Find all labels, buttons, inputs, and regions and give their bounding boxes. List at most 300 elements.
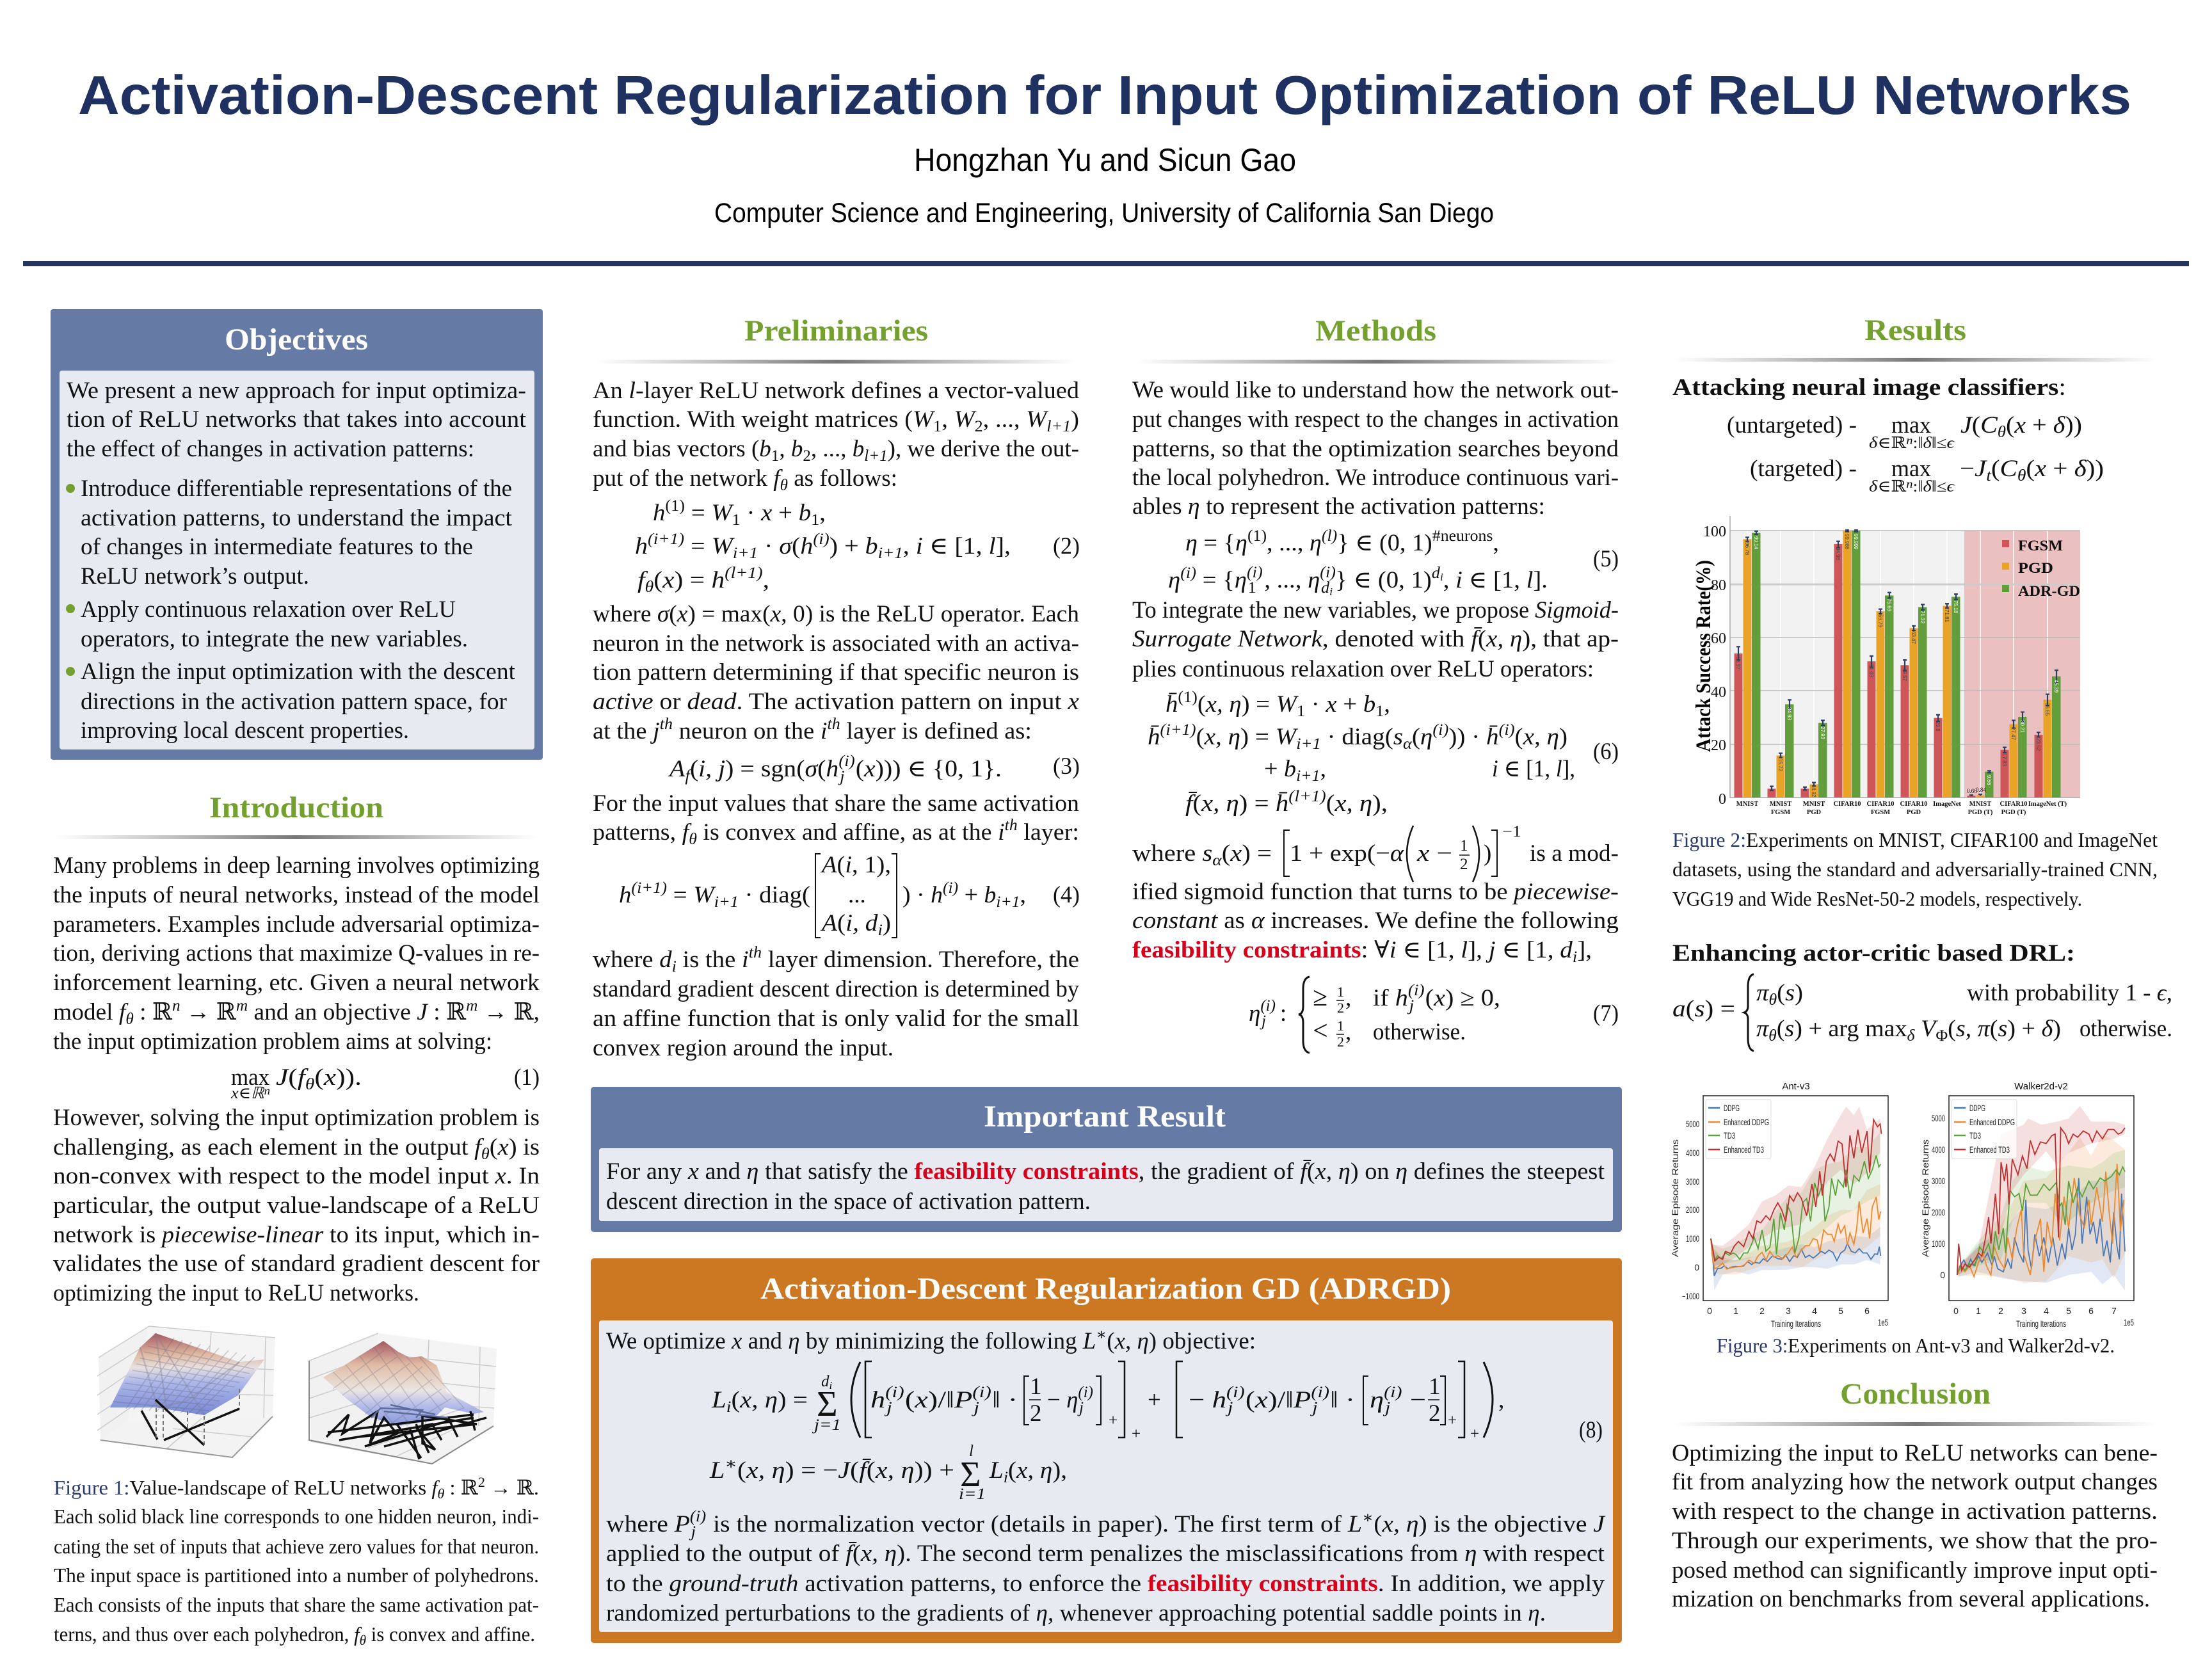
equations: attack objectives: (untargeted) - xyxy=(1727,412,1857,438)
equation 8: x, η) = xyxy=(740,1387,805,1413)
equation 4 xyxy=(619,852,1080,939)
text block: preliminaries opening: l+1 xyxy=(864,447,888,465)
Walker2d-v2 axes labels: Average Episode Returns xyxy=(1920,1139,1930,1257)
equation 7: ≥ xyxy=(1313,982,1327,1012)
left landscape plot xyxy=(97,1326,275,1457)
bar value labels: 36.65 xyxy=(2044,703,2050,716)
heading: objectives: Objectives xyxy=(225,323,368,357)
chart legend: FGSM xyxy=(2018,538,2063,554)
text block: preliminaries opening: W xyxy=(954,406,977,433)
text block: preliminaries closing: where d xyxy=(593,947,671,973)
text block: ADRGD explanation: L xyxy=(1347,1511,1362,1537)
equation 2: i ∈ [1, l], xyxy=(916,533,1009,559)
equation 8: ( xyxy=(905,1387,915,1413)
x axis labels: PGD xyxy=(1907,809,1921,816)
text block: modified sigmoid function: is a mod- xyxy=(1530,840,1619,867)
text block: preliminaries opening: ), we derive the out- xyxy=(888,436,1079,462)
Walker2d-v2 axes labels: 7 xyxy=(2112,1306,2117,1316)
equations: attack objectives: C xyxy=(2000,456,2018,482)
equation: policy: θ xyxy=(1768,1027,1777,1045)
equation 1: x)). xyxy=(324,1064,358,1091)
text block: preliminaries opening: 1 xyxy=(771,447,779,465)
Ant-v3 legend: DDPG xyxy=(1724,1103,1740,1113)
bar value labels: 99.14 xyxy=(1753,536,1759,550)
text block: introduction paragraph 2: optimizing the input to ReLU networks. xyxy=(53,1280,419,1306)
equation 8: (i) xyxy=(972,1384,991,1401)
equation 2: 1 xyxy=(811,511,819,529)
text block: methods opening: patterns, so that the optimization searches beyond xyxy=(1132,436,1619,462)
equation 3: x))) ∈ {0, 1}. xyxy=(864,756,993,782)
Walker2d-v2 axes labels: 1 xyxy=(1976,1306,1981,1316)
text block: conclusion: posed method can significantly improve input opti- xyxy=(1672,1557,2158,1583)
equation 3: j xyxy=(838,768,845,785)
line chart: Ant-v3 xyxy=(1670,1081,1888,1329)
text block: modified sigmoid function xyxy=(1132,823,1619,966)
Ant-v3 axes labels: 5000 xyxy=(1686,1119,1699,1129)
equation 3 xyxy=(668,753,1080,785)
equation 3: ( xyxy=(856,756,864,782)
text block: modified sigmoid function: 1 + exp(− α xyxy=(1290,840,1405,867)
equation: policy: ( xyxy=(1948,1016,1956,1042)
text block: objectives intro xyxy=(67,378,527,462)
bar value labels: 94.98 xyxy=(1835,547,1841,561)
text block: convex and affine: θ xyxy=(689,831,697,848)
equation 4: i xyxy=(878,922,883,939)
equation 6: 1 xyxy=(1375,703,1384,720)
equation 8: x, η) = − J(f̄(x, η)) + xyxy=(746,1457,949,1484)
figure 1: value-landscape plots xyxy=(97,1326,497,1464)
Ant-v3 axes labels: 1 xyxy=(1733,1306,1738,1316)
equation 2: i+1 xyxy=(878,545,903,562)
heading: results: Results xyxy=(1864,314,1966,347)
text block: ADRGD explanation: is the normalization vector (details in paper). The first term of xyxy=(707,1511,1348,1537)
equation 8: ( xyxy=(737,1457,746,1484)
heading: introduction: Introduction xyxy=(209,791,383,824)
Walker2d-v2 axes labels: 0 xyxy=(1940,1270,1945,1280)
equation 6: h̄ xyxy=(1486,724,1499,750)
equation: policy xyxy=(1672,974,2172,1051)
text block: introduction paragraph 1: the input optimization problem aims at solving: xyxy=(53,1029,492,1055)
equation 3: (i) xyxy=(838,753,855,770)
chart legend: PGD xyxy=(2018,560,2053,576)
line chart: Walker2d-v2: Walker2d-v2 xyxy=(2014,1081,2068,1092)
Walker2d-v2 legend: Enhanced DDPG xyxy=(1969,1117,2015,1127)
Ant-v3 axes labels: 0 xyxy=(1707,1306,1712,1316)
text block: preliminaries opening: , ..., xyxy=(983,406,1026,433)
text block: preliminaries closing: i xyxy=(672,958,677,975)
text block: introduction paragraph 1: m xyxy=(236,997,248,1014)
text block: modified sigmoid function: x) = xyxy=(1230,840,1269,867)
bullet list: objectives: improving local descent properties. xyxy=(81,717,409,744)
bar value labels: 27.47 xyxy=(2010,727,2016,741)
x axis labels: FGSM xyxy=(1871,809,1890,816)
equation 4: · diag( xyxy=(739,882,810,908)
text block: modified sigmoid function: 1 xyxy=(1460,837,1468,854)
authors: Hongzhan Yu and Sicun Gao xyxy=(914,142,1296,178)
equation 6: (1) xyxy=(1178,689,1198,706)
equation 4: + xyxy=(958,882,984,908)
text block: preliminaries opening: function. With weight matrices ( W xyxy=(593,406,933,433)
equation 8: 1 xyxy=(1030,1374,1042,1400)
Ant-v3 axes labels: 0 xyxy=(1694,1262,1699,1272)
bars xyxy=(1735,530,2061,797)
text block: ADRGD explanation: ∗ xyxy=(1362,1509,1374,1527)
bar value labels: 34.93 xyxy=(1786,707,1792,721)
equation 6: i ∈ [1, l], xyxy=(1492,756,1575,782)
text block: modified sigmoid function: α xyxy=(1212,852,1222,869)
Walker2d-v2 legend: DDPG xyxy=(1969,1103,1985,1113)
equation 8: (i) xyxy=(1384,1384,1402,1401)
equation 8: j xyxy=(884,1399,892,1416)
text block: introduction paragraph 1: → ℝ, xyxy=(477,999,540,1025)
bar value labels: 71.81 xyxy=(1944,609,1950,623)
text block: introduction paragraph 2: non-convex with respect to the model input x. In xyxy=(53,1163,540,1189)
text: objective intro: We optimize x and η by minimizing the following L xyxy=(606,1328,1096,1354)
equation 6: ( xyxy=(1326,790,1334,817)
text block: ADRGD explanation: j xyxy=(689,1523,696,1541)
text block: introduction paragraph 2: ( xyxy=(490,1134,498,1160)
text block: methods opening: put changes with respect to the changes in activation xyxy=(1132,406,1619,433)
y axis label: Attack Success Rate(%) xyxy=(1692,560,1715,752)
bar value labels: 29.8 xyxy=(1935,721,1941,732)
equation 1: x∈ℝ xyxy=(231,1085,262,1102)
equation 2: (l+1) xyxy=(725,565,763,582)
Ant-v3 legend: Enhanced DDPG xyxy=(1724,1117,1769,1127)
equation 4: W xyxy=(693,882,716,908)
text block: ADRGD explanation: (i) xyxy=(690,1508,706,1525)
equation 2 xyxy=(635,497,1080,596)
header: title, authors, affiliation xyxy=(78,65,2131,228)
equation 1: ( xyxy=(314,1064,324,1091)
bar value labels: 0.84 xyxy=(1976,787,1986,793)
equation 8: ( xyxy=(1008,1457,1016,1484)
text block: conclusion: fit from analyzing how the network output changes xyxy=(1672,1469,2158,1495)
equation 2: h xyxy=(653,500,665,526)
equation 1 xyxy=(230,1064,540,1102)
Ant-v3 axes labels: 1e5 xyxy=(1878,1317,1888,1327)
equation 8: x)/‖P xyxy=(1255,1387,1308,1413)
equation 5: i xyxy=(1440,571,1443,583)
text block: introduction paragraph 1: tion, deriving actions that maximize Q-values in re- xyxy=(53,940,540,966)
equation 4: (4) xyxy=(1053,882,1080,908)
bar value labels: 99.999 xyxy=(1853,534,1859,550)
equation 8: η xyxy=(1370,1387,1384,1413)
caption: figure 1: Each solid black line corresponds to one hidden neuron, indi- xyxy=(54,1505,539,1528)
equation 5: η xyxy=(1168,567,1180,593)
equation 8: (i) xyxy=(1226,1384,1245,1401)
bar value labels: 23.52 xyxy=(2035,738,2041,751)
y axis ticks: 60 xyxy=(1711,630,1726,647)
equation 2: i+1 xyxy=(733,545,758,562)
bar value labels: 51.03 xyxy=(1868,664,1874,678)
equation 6 xyxy=(1148,689,1619,817)
caption: figure 1: θ xyxy=(437,1486,445,1502)
text block: ADRGD explanation xyxy=(606,1508,1606,1626)
text block: methods opening: ables η to represent the activation patterns: xyxy=(1132,493,1545,520)
text block: introduction paragraph 1: m xyxy=(466,997,477,1014)
equation 7: if h xyxy=(1373,985,1407,1011)
text block: preliminaries closing: layer dimension. Therefore, the xyxy=(762,947,1079,973)
equation 8: ‖ · xyxy=(992,1387,1018,1413)
equation 5 xyxy=(1168,527,1619,598)
equation 2: = xyxy=(684,533,712,559)
bullet list: objectives: Introduce differentiable representations of the xyxy=(81,476,512,502)
text block: relu operator and activation pattern: th xyxy=(828,716,840,733)
bar value labels: 99.986 xyxy=(1844,534,1850,550)
text block: objectives intro: the effect of changes in activation patterns: xyxy=(67,436,474,462)
Walker2d-v2 axes labels: 3000 xyxy=(1932,1176,1945,1186)
equation: policy: V xyxy=(1921,1016,1939,1042)
text block: preliminaries opening: l+1 xyxy=(1046,418,1071,435)
equation 7: (i) xyxy=(1408,982,1425,999)
equation 7: j xyxy=(1260,1013,1266,1030)
equation 3: A xyxy=(668,756,685,782)
panel: objectives xyxy=(51,309,543,760)
text block: convex and affine: is convex and affine, as at the xyxy=(697,819,998,846)
x axis labels: ImageNet xyxy=(1933,801,1961,808)
text block: preliminaries opening: 2 xyxy=(803,447,811,465)
caption: figure 2: Figure 2:Experiments on MNIST, CIFAR100 and ImageNet xyxy=(1672,828,2158,851)
equation 6: , xyxy=(1320,756,1326,782)
equation 6: (6) xyxy=(1593,739,1619,765)
text block: ADRGD explanation: ( xyxy=(1374,1511,1382,1537)
subheading: attacking classifiers: Attacking neural image classifiers : xyxy=(1672,374,2066,401)
text block: conclusion xyxy=(1672,1440,2158,1612)
Walker2d-v2 legend: TD3 xyxy=(1969,1130,1981,1141)
text block: relu operator and activation pattern: layer is defined as: xyxy=(840,718,1032,744)
equation: policy: s) xyxy=(1785,980,1802,1006)
Ant-v3 legend: TD3 xyxy=(1724,1130,1735,1141)
equation 2: , xyxy=(903,533,916,559)
text block: preliminaries opening: , xyxy=(779,436,791,462)
equations: attack objectives: n xyxy=(1906,477,1913,490)
text block: preliminaries opening: and bias vectors (b xyxy=(593,436,771,462)
equation 7: η xyxy=(1249,1000,1260,1027)
bar value labels: 53.97 xyxy=(1735,657,1741,670)
equation 4: (i) xyxy=(943,879,958,897)
text block: introduction paragraph 1: inforcement learning, etc. Given a neural network xyxy=(53,970,540,996)
equation 2: ( xyxy=(653,567,662,593)
equation 7: 1 xyxy=(1337,984,1344,1000)
bar value labels: 15.72 xyxy=(1777,758,1783,772)
equations: attack objectives: θ xyxy=(2017,467,2026,485)
x axis labels: MNIST xyxy=(1803,801,1825,808)
text block: conclusion: with respect to the change in activation patterns. xyxy=(1672,1498,2158,1525)
Walker2d-v2 axes labels: 3 xyxy=(2021,1306,2026,1316)
caption: figure 2: datasets, using the standard and adversarially-trained CNN, xyxy=(1672,858,2158,881)
bar value labels: 63.47 xyxy=(1911,631,1916,645)
equation 4: , xyxy=(1020,882,1026,908)
equation 7: 1 xyxy=(1337,1018,1344,1034)
text block: introduction paragraph 1: n xyxy=(172,997,180,1014)
text block: objectives intro: tion of ReLU networks that takes into account xyxy=(67,406,527,433)
equation 8: 2 xyxy=(1030,1400,1042,1427)
equation 8: L xyxy=(709,1457,725,1484)
equation 6: ( xyxy=(1412,724,1420,750)
text block: methods opening: We would like to understand how the network out- xyxy=(1132,377,1619,403)
equation 1: (1) xyxy=(514,1064,540,1091)
text block: important result xyxy=(606,1158,1605,1215)
equation 2: h xyxy=(635,533,648,559)
equation 6: , xyxy=(1384,691,1390,717)
equation 2: (1) xyxy=(665,497,685,515)
equation 4: ) · h xyxy=(902,882,943,908)
text block: introduction paragraph 1: and an objective xyxy=(248,999,417,1025)
equations: attack objectives: x + δ)) xyxy=(2014,412,2081,438)
equation 8: i xyxy=(1004,1469,1008,1486)
equation 8: l xyxy=(969,1443,974,1460)
Ant-v3 axes labels: 6 xyxy=(1864,1306,1870,1316)
bullet list: objectives: Apply continuous relaxation over ReLU xyxy=(81,597,456,623)
equation 3: ( xyxy=(690,756,698,782)
equation 8: Σ xyxy=(960,1455,981,1495)
equation 7: x) ≥ 0, xyxy=(1434,985,1496,1011)
text block: preliminaries opening: θ xyxy=(780,477,788,494)
equation 6: (i) xyxy=(1499,721,1515,739)
equation 7: , xyxy=(1345,1019,1351,1045)
Walker2d-v2 axes labels: 5 xyxy=(2066,1306,2071,1316)
equation 5: i xyxy=(1329,586,1333,598)
equation 6: x + b xyxy=(1326,691,1375,717)
caption: figure 1 xyxy=(54,1474,539,1648)
equation 5: η xyxy=(1310,530,1322,556)
text block: conclusion: mization on benchmarks from several applications. xyxy=(1672,1586,2150,1612)
equations: attack objectives: :‖ xyxy=(1913,478,1923,495)
text block: preliminaries opening: 2 xyxy=(975,418,983,435)
text block: introduction paragraph 2: x) is xyxy=(498,1134,538,1160)
equation 5: η xyxy=(1308,567,1320,593)
equation 6: h̄ xyxy=(1148,724,1160,750)
equation: policy: δ xyxy=(1907,1027,1915,1045)
bar value labels: 0.66 xyxy=(1967,788,1977,794)
equation 4: i+1 xyxy=(996,894,1020,911)
caption: figure 1: 2 xyxy=(478,1474,485,1490)
text block: introduction paragraph 2: network is piecewise-linear to its input, which in- xyxy=(53,1222,540,1248)
caption: figure 3: Figure 3:Experiments on Ant-v3 and Walker2d-v2. xyxy=(1717,1334,2115,1357)
equation 8: d xyxy=(821,1373,830,1390)
text block: ADRGD explanation: randomized perturbations to the gradients of η, whenever approaching potential saddle points in η. xyxy=(606,1600,1546,1626)
Walker2d-v2 axes labels: 0 xyxy=(1953,1306,1959,1316)
text block: introduction paragraph 1 xyxy=(53,853,540,1055)
equation 5: d xyxy=(1432,565,1440,582)
heading: methods: Methods xyxy=(1315,314,1436,348)
bullet list: objectives: directions in the activation pattern space, for xyxy=(81,689,507,715)
equation 2: σ(h xyxy=(779,533,812,559)
equation: policy: s) + arg max xyxy=(1784,1016,1903,1042)
bar value labels: 9.66 xyxy=(1986,775,1992,785)
text block: introduction paragraph 1: θ xyxy=(125,1011,134,1028)
bullet list: objectives: Align the input optimization with the descent xyxy=(81,659,516,685)
equation 7: j xyxy=(1407,997,1414,1014)
text block: modified sigmoid function: where s xyxy=(1132,840,1212,867)
y axis ticks: 100 xyxy=(1703,524,1726,540)
equation: policy: otherwise. xyxy=(2080,1016,2172,1042)
equation 8: + xyxy=(1448,1412,1457,1429)
equation 6: )) · xyxy=(1448,724,1486,750)
equation 8: 2 xyxy=(1429,1400,1440,1427)
subheading: enhancing DRL: Enhancing actor-critic based DRL: xyxy=(1672,940,2075,966)
equations: attack objectives: δ‖≤ϵ xyxy=(1923,435,1953,452)
y axis ticks: 80 xyxy=(1711,577,1726,594)
bullet list: objectives: of changes in intermediate features to the xyxy=(81,534,473,560)
Ant-v3 axes labels: 3 xyxy=(1786,1306,1791,1316)
text block: ADRGD explanation: applied to the output of f̄(x, η). The second term penalizes the misclassifications from η with respect xyxy=(606,1541,1605,1567)
affiliation: Computer Science and Engineering, University of California San Diego xyxy=(714,198,1494,228)
equation 6: f̄(x, η) = h̄ xyxy=(1185,790,1287,817)
x axis labels: MNIST xyxy=(1969,801,1991,808)
equation 8: i xyxy=(726,1399,732,1416)
Walker2d-v2 legend xyxy=(1952,1100,2017,1158)
Walker2d-v2 curves xyxy=(1957,1106,2125,1290)
x axis labels: CIFAR10 xyxy=(1834,801,1861,808)
bullet list: objectives xyxy=(66,476,516,744)
equation 8: (8) xyxy=(1579,1417,1603,1443)
equation 4: = xyxy=(667,882,693,908)
equation 6: (l+1) xyxy=(1288,788,1326,805)
equation: policy: π xyxy=(1756,1016,1770,1042)
equation 5: 1 xyxy=(1248,579,1256,597)
text block: preliminaries opening: put of the network f xyxy=(593,465,780,492)
bar value labels: 71.32 xyxy=(1919,611,1925,624)
equation 8: j xyxy=(1310,1399,1318,1416)
Ant-v3 axes labels: 2 xyxy=(1759,1306,1765,1316)
equation 8 xyxy=(709,1361,1603,1503)
equation 5: (i) xyxy=(1247,564,1263,581)
panel: important result xyxy=(591,1087,1622,1232)
panel: introduction xyxy=(53,791,540,1648)
text block: relu operator and activation pattern: neuron on the xyxy=(673,718,821,744)
caption: figure 1: Each consists of the inputs that share the same activation pat- xyxy=(54,1593,539,1616)
text block: introduction paragraph 2 xyxy=(53,1105,540,1306)
equation 6: x, η) xyxy=(1523,724,1567,750)
text block: modified sigmoid function: 2 xyxy=(1460,856,1468,873)
equation 8: L xyxy=(711,1387,726,1413)
equation 8: − η xyxy=(1047,1387,1078,1413)
text block: preliminaries closing: i xyxy=(742,947,749,973)
text: objective intro: ( xyxy=(1107,1328,1115,1354)
bar value labels: 17.83 xyxy=(2001,753,2007,767)
equation 8: ∗ xyxy=(725,1455,737,1473)
equation: policy: π xyxy=(1756,980,1770,1006)
equations: attack objectives: ( xyxy=(1991,456,2000,482)
equation 1: θ xyxy=(305,1076,314,1093)
text block: preliminaries opening: b xyxy=(791,436,803,462)
x axis labels: MNIST xyxy=(1736,801,1758,808)
equation 2: W xyxy=(711,500,734,526)
text block: conclusion: Optimizing the input to ReLU networks can bene- xyxy=(1672,1440,2158,1466)
equation 7: 2 xyxy=(1337,1034,1344,1050)
equation 4: A(i, d xyxy=(822,910,876,936)
text block: preliminaries opening xyxy=(593,378,1080,494)
equation: policy: θ xyxy=(1768,991,1777,1009)
bar value labels: 96.78 xyxy=(1744,542,1750,556)
text block: ADRGD explanation: where P xyxy=(606,1511,689,1537)
equation 4: i+1 xyxy=(714,894,739,911)
text block: introduction paragraph 1: the inputs of neural networks, instead of the model xyxy=(53,882,540,908)
equation 8: (i) xyxy=(1078,1384,1093,1401)
equation 2: W xyxy=(712,533,735,559)
equation 7: ( xyxy=(1425,985,1434,1011)
x axis labels: CIFAR10 xyxy=(1900,801,1927,808)
text block: sigmoid-surrogate network: Surrogate Network , denoted with f̄(x, η), that ap- xyxy=(1132,626,1619,652)
equation 7: (7) xyxy=(1593,1000,1619,1027)
equation 8: ( xyxy=(1246,1387,1255,1413)
equation 8: i xyxy=(830,1379,832,1391)
text block: introduction paragraph 1: Many problems in deep learning involves optimizing xyxy=(53,853,540,879)
equation 8: + xyxy=(1109,1412,1118,1429)
equations: attack objectives: −J xyxy=(1960,456,1985,482)
equation 8: j xyxy=(1382,1399,1390,1416)
